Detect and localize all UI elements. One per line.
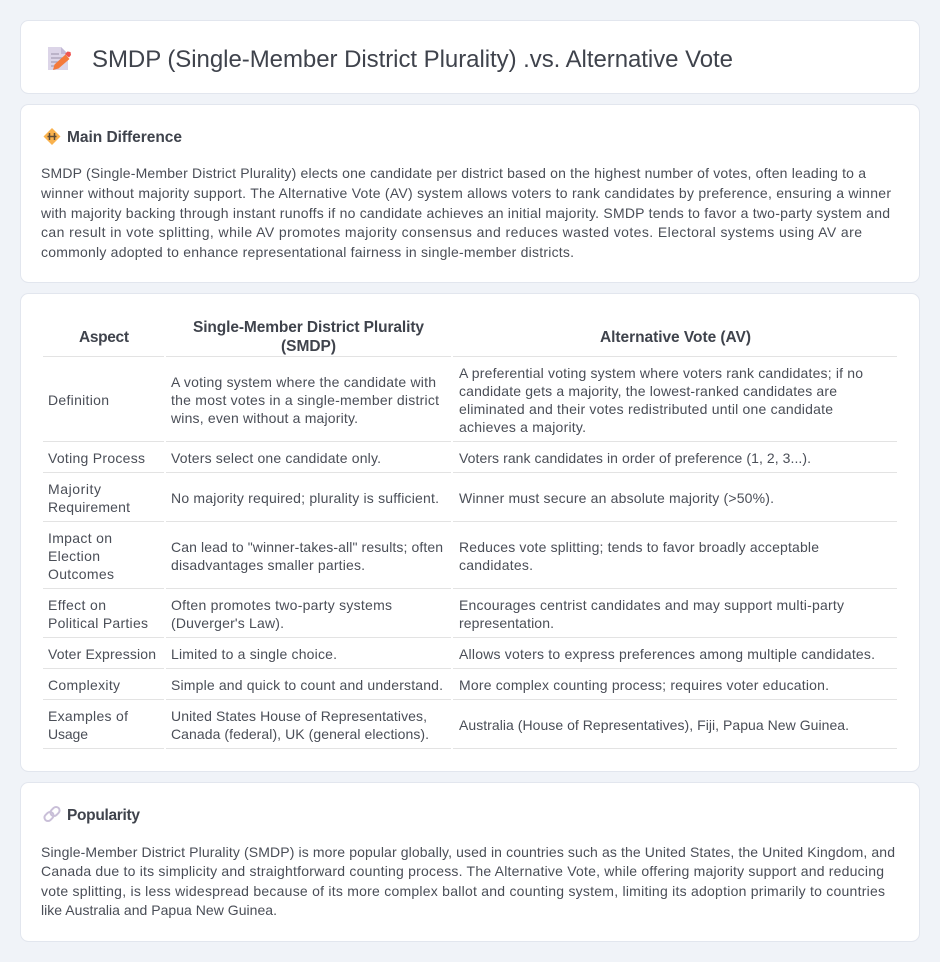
text block: popularity paragraph: Single-Member District Plurality (SMDP) is more popular globally, used in countries such as the United States, the United Kingdom, and: [41, 844, 895, 860]
row: impact on election outcomes: Reduces vote splitting; tends to favor broadly acceptable: [459, 539, 819, 555]
row: voter expression: [48, 646, 875, 662]
row: examples of usage: United States House of Representatives,: [171, 708, 427, 724]
row: complexity: [48, 677, 829, 693]
text block: popularity paragraph: [41, 844, 895, 918]
panel: main difference: [20, 104, 920, 282]
table header row: Aspect: [79, 329, 129, 346]
row: complexity: Complexity: [48, 677, 120, 693]
panel: popularity: [20, 782, 920, 942]
icon: warning diamond: [44, 128, 60, 145]
text block: main difference paragraph: SMDP (Single-Member District Plurality) elects one candidate per district based on the highest number of votes, often leading to a: [41, 165, 866, 181]
row: definition: [48, 365, 863, 435]
row: impact on election outcomes: Can lead to "winner-takes-all" results; often: [171, 539, 443, 555]
icon: document with pencil: [48, 47, 71, 70]
icon: chain link: [43, 805, 61, 823]
table header row: Alternative Vote (AV): [600, 329, 751, 346]
row: impact on election outcomes: Outcomes: [48, 566, 114, 582]
row: definition: candidate gets a majority, the lowest-ranked candidates are: [459, 383, 837, 399]
text block: main difference paragraph: commonly adopted to enhance representational fairness in single-member districts.: [41, 244, 574, 260]
heading: popularity: Popularity: [67, 807, 140, 824]
row: voter expression: Voter Expression: [48, 646, 156, 662]
row: complexity: Simple and quick to count and understand.: [171, 677, 443, 693]
row: voting process: Voters select one candidate only.: [171, 450, 381, 466]
text block: popularity paragraph: vote splitting, is less widespread because of its more complex ballot and counting system, limiting its adoption primarily to countries: [41, 883, 885, 899]
table header row: [79, 319, 751, 355]
row: effect on political parties: representation.: [459, 615, 554, 631]
title: SMDP (Single-Member District Plurality) .vs. Alternative Vote: [92, 46, 733, 73]
panel: comparison table: [20, 294, 920, 772]
row: examples of usage: Examples of: [48, 708, 128, 724]
row: effect on political parties: [48, 597, 844, 631]
row: impact on election outcomes: [48, 530, 819, 582]
row: voter expression: Allows voters to express preferences among multiple candidates.: [459, 646, 875, 662]
text block: popularity paragraph: Canada due to its simplicity and straightforward counting process. The Alternative Vote, while offering majority support and reducing: [41, 863, 884, 879]
row: definition: A voting system where the candidate with: [171, 374, 436, 390]
table header row: Single-Member District Plurality: [193, 319, 424, 336]
row: definition: the most votes in a single-member district: [171, 392, 439, 408]
heading: main difference: Main Difference: [67, 129, 182, 146]
row: majority requirement: No majority required; plurality is sufficient.: [171, 490, 439, 506]
row: effect on political parties: Political Parties: [48, 615, 148, 631]
row: voting process: Voting Process: [48, 450, 145, 466]
text block: main difference paragraph: can result in vote splitting, while AV promotes majority consensus and reduces wasted votes. Electoral systems using AV are: [41, 224, 862, 240]
text block: main difference paragraph: [40, 165, 891, 260]
row: definition: achieves a majority.: [459, 419, 586, 435]
row: examples of usage: [48, 708, 849, 742]
row: voting process: [48, 450, 811, 466]
row: impact on election outcomes: Election: [48, 548, 100, 564]
text block: main difference paragraph: winner without majority support. The Alternative Vote (AV) system allows voters to rank candidates by preference, ensuring a winner: [40, 185, 891, 201]
panel: title card: [20, 20, 920, 94]
row: impact on election outcomes: disadvantages smaller parties.: [171, 557, 365, 573]
row: examples of usage: Australia (House of Representatives), Fiji, Papua New Guinea.: [459, 717, 849, 733]
row: definition: eliminated and their votes redistributed until one candidate: [459, 401, 833, 417]
row: majority requirement: Winner must secure an absolute majority (>50%).: [459, 490, 774, 506]
row: majority requirement: Requirement: [48, 499, 130, 515]
text block: main difference paragraph: with majority backing through instant runoffs if no candidate achieves an initial majority. SMDP tends to favor a two-party system and: [40, 205, 890, 221]
row: effect on political parties: Encourages centrist candidates and may support multi-party: [459, 597, 844, 613]
row: examples of usage: Usage: [48, 726, 88, 742]
row: impact on election outcomes: Impact on: [48, 530, 112, 546]
row: impact on election outcomes: candidates.: [459, 557, 533, 573]
row: definition: wins, even without a majority.: [170, 410, 358, 426]
row: effect on political parties: Often promotes two-party systems: [171, 597, 392, 613]
row: voting process: Voters rank candidates in order of preference (1, 2, 3...).: [459, 450, 811, 466]
row: voter expression: Limited to a single choice.: [171, 646, 337, 662]
row: definition: Definition: [48, 392, 109, 408]
table row rules: [43, 356, 897, 749]
row: majority requirement: Majority: [48, 481, 101, 497]
row: definition: A preferential voting system where voters rank candidates; if no: [459, 365, 863, 381]
row: effect on political parties: Effect on: [48, 597, 106, 613]
text block: popularity paragraph: like Australia and Papua New Guinea.: [41, 902, 277, 918]
table header row: (SMDP): [281, 338, 336, 355]
row: examples of usage: Canada (federal), UK (general elections).: [171, 726, 429, 742]
row: effect on political parties: (Duverger's Law).: [171, 615, 284, 631]
row: complexity: More complex counting process; requires voter education.: [459, 677, 829, 693]
row: majority requirement: [48, 481, 774, 515]
